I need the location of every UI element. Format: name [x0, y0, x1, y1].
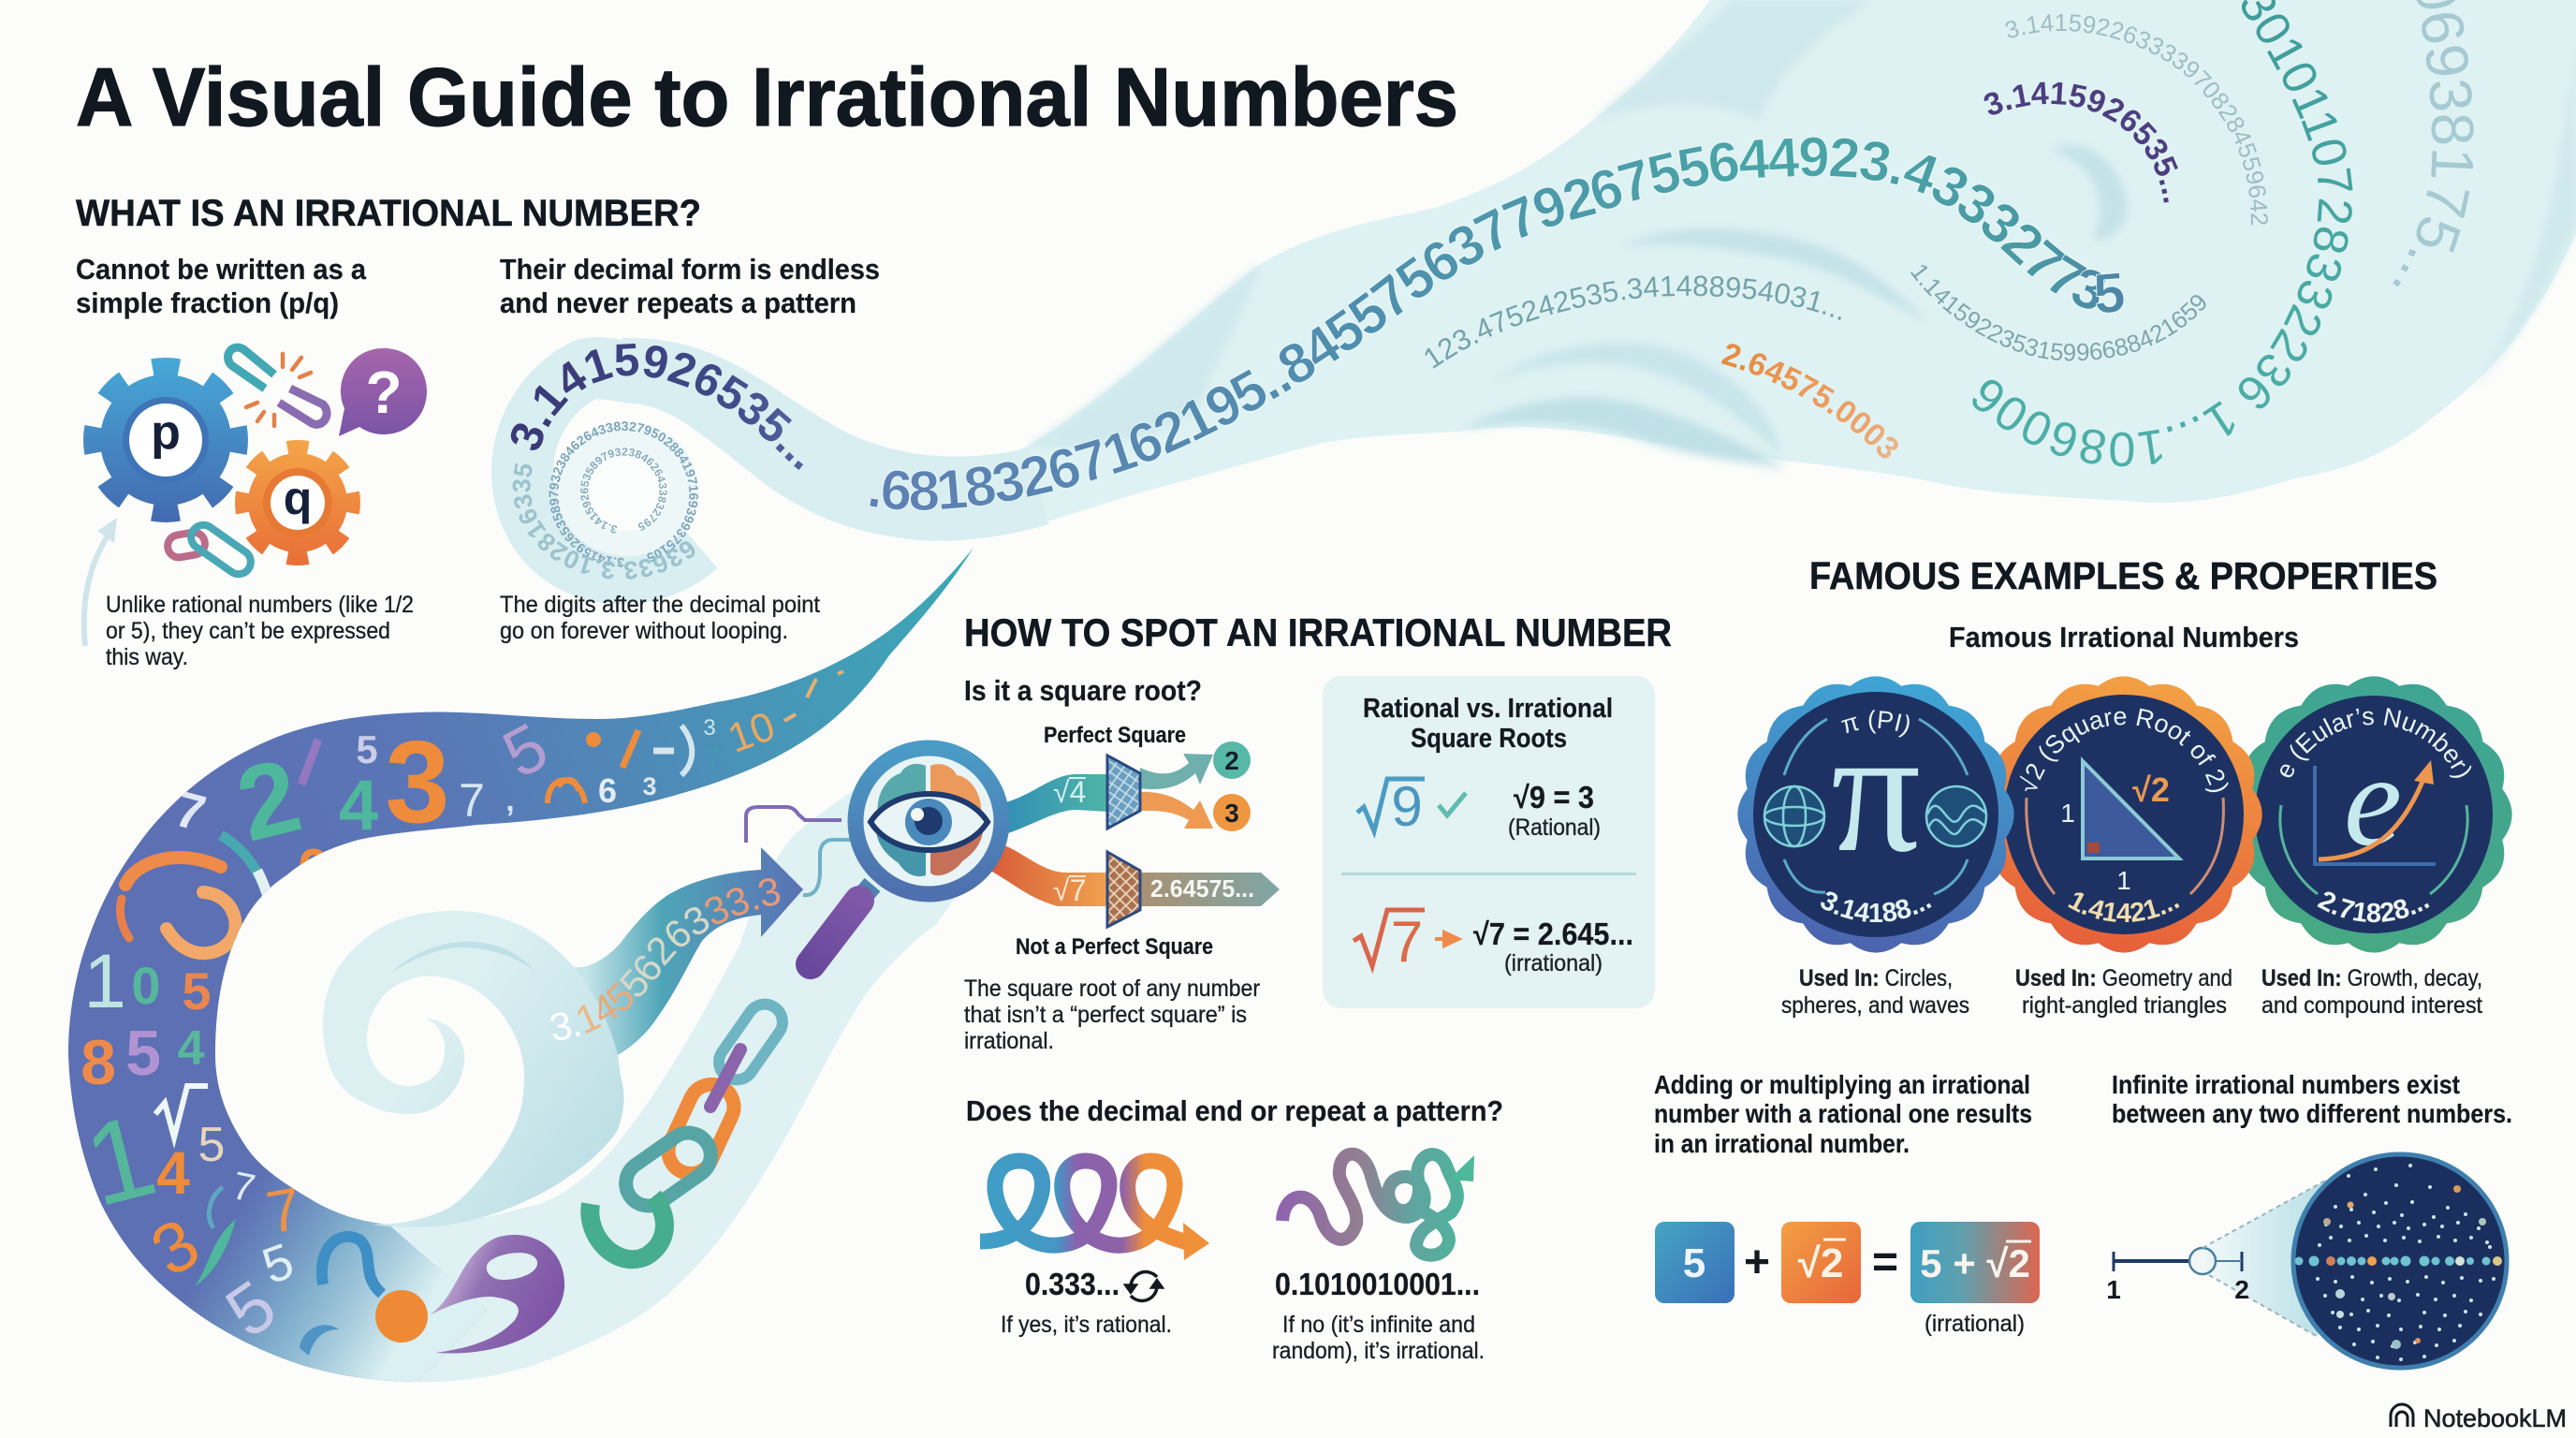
- body: digits go on forever: The digits after the decimal point: [500, 592, 820, 618]
- ribbon digits: 7: [261, 1174, 306, 1247]
- ribbon digits: [73, 671, 843, 1353]
- flow: perfect square branch: √4: [1053, 775, 1086, 809]
- panel heading: Rational vs. Irrational: [1363, 694, 1613, 724]
- ribbon digits: 5: [182, 961, 212, 1020]
- caption: e: [2261, 965, 2482, 1019]
- caption: pi: Used In: Circles,: [1799, 965, 1953, 991]
- example: root 9: [1357, 775, 1601, 841]
- label: not a perfect square: Not a Perfect Square: [1016, 934, 1213, 960]
- badge: e, Euler's number: [2248, 676, 2512, 953]
- body: unlike rational numbers: this way.: [106, 644, 188, 670]
- node: result 2: [1213, 741, 1251, 779]
- icon: wires: [746, 807, 850, 895]
- badge: square root of 2: √2 (Square Root of 2): [2020, 708, 2229, 792]
- icon: repeat arrows: [1126, 1272, 1162, 1300]
- ribbon digits: 10: [722, 703, 781, 762]
- text: adding or multiplying: Adding or multiplying an irrational: [1654, 1070, 2030, 1099]
- ribbon digits: 5: [256, 1233, 300, 1295]
- badge: square root of 2: √2: [2132, 770, 2170, 809]
- text: adding or multiplying: number with a rational one results: [1654, 1099, 2032, 1128]
- example: root 9: √9 = 3: [1514, 780, 1594, 814]
- section: what is an irrational number: [76, 193, 880, 670]
- ribbon digits: 7: [169, 781, 212, 843]
- panel heading: Square Roots: [1411, 724, 1567, 754]
- icon: orange gear q: q: [284, 472, 312, 524]
- ribbon digits: 4: [178, 1021, 205, 1076]
- icon: gears, broken chain and question mark: [84, 347, 427, 646]
- body: square root rule: The square root of any number: [964, 976, 1260, 1002]
- example: root 7: [1354, 910, 1633, 976]
- badge: pi: π (PI): [1841, 710, 1910, 738]
- ribbon digits: 2: [227, 736, 311, 864]
- body: digits go on forever: [500, 592, 820, 644]
- illustration: swirl: [323, 911, 623, 1227]
- box: root two: √2: [1798, 1240, 1843, 1286]
- spiral digits: outer headline: 3.1415926535...: [511, 344, 803, 470]
- badge: pi: 3.14188...: [1821, 891, 1932, 922]
- node: result 2: 2: [1224, 746, 1239, 775]
- example: root 7: √7 = 2.645...: [1473, 917, 1633, 951]
- badge: pi: π: [1831, 693, 1921, 889]
- ribbon digits: 1: [73, 1091, 168, 1231]
- node: result 3: [1213, 794, 1251, 831]
- example: root 9: 9: [1391, 775, 1423, 838]
- illustration: flowing ribbon of digits across the top right: [1020, 0, 2576, 529]
- icon: tangled path: [1282, 1154, 1474, 1255]
- heading: HOW TO SPOT AN IRRATIONAL NUMBER: [964, 610, 1672, 654]
- subheading: Does the decimal end or repeat a pattern?: [966, 1094, 1503, 1127]
- ribbon digits: ,: [505, 783, 515, 818]
- ribbon digits: 5: [356, 727, 378, 771]
- caption: pi: [1781, 965, 1969, 1019]
- caption: root 2: right-angled triangles: [2022, 992, 2227, 1019]
- text: infinite irrationals: Infinite irrational numbers exist: [2112, 1070, 2460, 1099]
- ribbon digits: 0: [298, 838, 329, 902]
- text: repeating decimal: 0.333...: [1025, 1267, 1120, 1301]
- subheading: endless: Their decimal form is endless: [500, 253, 880, 286]
- label: irrational: (irrational): [1925, 1311, 2025, 1337]
- arrow: digit stream to magnifier: 3.1455626333.3: [550, 878, 781, 1041]
- section: famous examples and properties: [1737, 554, 2512, 1019]
- digit stream: pale lower: 1.141592235315996688421659: [1910, 264, 2205, 361]
- number line from 1 to 2: 1: [2106, 1275, 2121, 1304]
- caption: e: Used In: Growth, decay,: [2261, 965, 2482, 991]
- icon: blue gear p: [94, 368, 238, 512]
- illustration: spiral ribbon: [491, 337, 1048, 605]
- illustration: light band to magnifier: [299, 740, 1006, 1382]
- badge: square root of 2: 1: [2060, 799, 2075, 828]
- ribbon digits: 5: [212, 1265, 290, 1353]
- arrow: thin pale curved: [84, 518, 117, 646]
- heading: FAMOUS EXAMPLES & PROPERTIES: [1809, 554, 2437, 597]
- digit stream: purple: 3.1415926535...: [1984, 82, 2178, 202]
- panel heading: [1363, 694, 1613, 754]
- title: A Visual Guide to Irrational Numbers: [76, 51, 1458, 143]
- example: root 7: 7: [1391, 910, 1423, 975]
- symbol: equals: =: [1872, 1238, 1898, 1287]
- magnified view with dots: [2293, 1154, 2507, 1368]
- larger accent dots: [2323, 1185, 2486, 1349]
- badge: square root of 2: [1999, 676, 2262, 953]
- example: root 7: (irrational): [1504, 950, 1603, 976]
- badge: pi: [1737, 676, 2014, 953]
- ribbon digits: 7: [228, 1163, 259, 1211]
- box: five plus root two: 5 + √2: [1920, 1241, 2030, 1285]
- flow: perfect square branch: [992, 741, 1251, 838]
- icon: sphere: [1764, 786, 1824, 846]
- box: five: 5: [1683, 1240, 1705, 1286]
- icon: repeating loops: [980, 1161, 1209, 1260]
- section: density of irrationals: [2106, 1070, 2512, 1368]
- text: adding or multiplying: in an irrational number.: [1654, 1129, 1910, 1158]
- body: digits go on forever: go on forever without looping.: [500, 618, 788, 644]
- icon: waves: [1926, 786, 1986, 846]
- box: five plus root two: [1910, 1222, 2040, 1303]
- ribbon digits: 3: [386, 718, 449, 847]
- illustration: colourful number ribbon: [56, 548, 973, 1395]
- text: infinite irrationals: [2112, 1070, 2512, 1128]
- body: square root rule: irrational.: [964, 1028, 1054, 1054]
- main digit stream: .68183267162195..8455756377926755644923.433327735: [869, 137, 2125, 511]
- ribbon digits: 6: [598, 771, 617, 810]
- ribbon digits: 4: [339, 766, 378, 845]
- ribbon digits: 0: [131, 956, 161, 1015]
- subheading: fraction: simple fraction (p/q): [76, 286, 339, 319]
- caption: root 2: [2015, 965, 2232, 1019]
- icon: speech bubble question mark: [339, 348, 427, 436]
- ribbon digits: 7: [459, 774, 485, 827]
- example: root 9: (Rational): [1508, 814, 1601, 841]
- badge: square root of 2: 1.41421...: [2068, 892, 2179, 922]
- digit stream: orange: 2.64575.0003: [1720, 344, 1898, 459]
- body: unlike rational numbers: [106, 592, 414, 670]
- caption: root 2: Used In: Geometry and: [2015, 965, 2232, 991]
- text: if yes: If yes, it’s rational.: [1001, 1312, 1172, 1338]
- ribbon digits: 3: [139, 1203, 212, 1292]
- ribbon digits: 1: [83, 939, 126, 1024]
- subheading: Famous Irrational Numbers: [1949, 621, 2299, 653]
- symbol: plus: +: [1744, 1238, 1770, 1287]
- body: unlike rational numbers: or 5), they can’t be expressed: [106, 618, 390, 644]
- section: does the decimal end or repeat: [966, 1094, 1503, 1364]
- icon: blue gear p: p: [151, 405, 181, 460]
- ribbon digits: 5: [125, 1018, 161, 1089]
- badge: e, Euler's number: 2.71828...: [2318, 891, 2430, 923]
- label: perfect square: Perfect Square: [1044, 723, 1186, 748]
- icon: orange gear q: [242, 448, 353, 558]
- badge: e, Euler's number: e: [2344, 728, 2402, 873]
- number line from 1 to 2: 2: [2234, 1275, 2249, 1304]
- icon: magnifying glass with brain and eye: [811, 748, 1002, 964]
- text: if no: If no (it’s infinite and: [1282, 1312, 1475, 1338]
- box: five: [1655, 1222, 1734, 1303]
- flow: not a perfect square branch: [990, 843, 1280, 927]
- subheading: endless: and never repeats a pattern: [500, 286, 856, 319]
- subheading: fraction: [76, 253, 367, 319]
- illustration: ball and purple nine: [300, 1235, 564, 1356]
- spiral digits: inner rings: 3.14159265358979323846264338327950288419716939937510582097494459230781640628: [549, 421, 698, 567]
- ribbon digits: 7: [707, 743, 720, 771]
- icon: eye: [871, 794, 988, 850]
- icon: linked chain: [166, 521, 256, 579]
- icon: chain links: [590, 997, 789, 1259]
- badge: square root of 2: 1: [2116, 866, 2131, 895]
- ribbon digits: 3: [642, 772, 657, 800]
- logo: NotebookLM: NotebookLM: [2423, 1404, 2567, 1432]
- heading: WHAT IS AN IRRATIONAL NUMBER?: [76, 193, 701, 234]
- digit stream: pale upper: 3.1415922633339708284559642: [2005, 14, 2268, 225]
- row of dots: [2295, 1256, 2502, 1266]
- icon: filter prism brown: [1107, 852, 1140, 927]
- text: if no: [1272, 1312, 1485, 1364]
- body: square root rule: that isn’t a “perfect square” is: [964, 1002, 1247, 1028]
- badge: e, Euler's number: e (Eular’s Number): [2280, 708, 2471, 778]
- icon: broken chain links: [228, 347, 327, 426]
- spiral digits: small inner ring: 3.14159265358979323846264338327950288419: [580, 448, 667, 534]
- number line from 1 to 2: [2106, 1180, 2327, 1337]
- body: square root rule: [964, 976, 1260, 1054]
- body: unlike rational numbers: Unlike rational numbers (like 1/2: [106, 592, 414, 618]
- icon: filter prism: [1107, 756, 1140, 829]
- subheading: fraction: Cannot be written as a: [76, 253, 367, 286]
- ribbon digits: 3: [703, 715, 716, 741]
- caption: e: and compound interest: [2261, 992, 2482, 1019]
- caption: pi: spheres, and waves: [1781, 992, 1969, 1019]
- subheading: square root: Is it a square root?: [964, 674, 1202, 707]
- scattered dots: [2318, 1166, 2494, 1359]
- panel: rational vs irrational square roots: [1323, 676, 1655, 1008]
- ribbon digits: 8: [80, 1027, 116, 1098]
- text: if no: random), it’s irrational.: [1272, 1338, 1485, 1364]
- section: closure property: [1654, 1070, 2040, 1337]
- section: how to spot an irrational number: [964, 610, 1672, 1054]
- flow: not a perfect square branch: √7: [1053, 873, 1086, 907]
- ribbon digits: 5: [491, 709, 560, 793]
- ribbon digits: 4: [156, 1139, 190, 1207]
- subheading: endless: [500, 253, 880, 319]
- icon: brain lobes: [876, 764, 983, 876]
- text: infinite irrationals: between any two different numbers.: [2112, 1099, 2512, 1128]
- label: decimal in arrow: 2.64575...: [1150, 874, 1254, 902]
- zoom cone: [2203, 1180, 2327, 1337]
- node: result 3: 3: [1224, 799, 1239, 828]
- text: non-repeating decimal: 0.1010010001...: [1275, 1267, 1480, 1301]
- text: adding or multiplying: [1654, 1070, 2032, 1158]
- digit stream: middle: 123.475242535.341488954031...: [1425, 275, 1841, 369]
- box: root two: [1781, 1222, 1861, 1303]
- icon: speech bubble question mark: ?: [365, 359, 402, 426]
- ribbon digits: 5: [198, 1118, 225, 1172]
